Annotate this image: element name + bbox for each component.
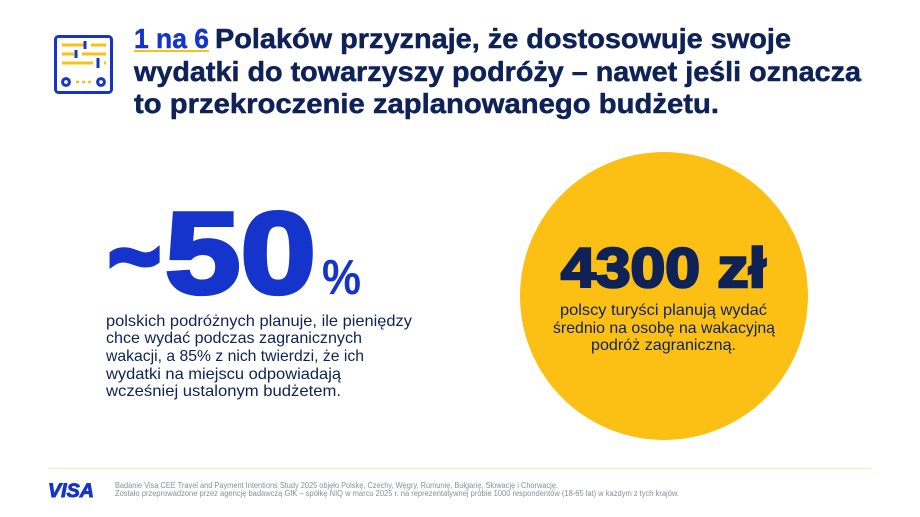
text: average spend description: polscy turyści planują wydać	[560, 302, 767, 319]
footnote	[115, 481, 679, 498]
footnote: Zostało przeprowadzone przez agencję badawczą GfK – spółkę NIQ w marcu 2025 r. na reprezentatywnej próbie 1000 respondentów (18-65 lat) w każdym z tych krajów.	[115, 489, 679, 498]
text: budget planning description: wakacji, a 85% z nich twierdzi, że ich	[105, 348, 364, 365]
text: average spend description: podróż zagraniczną.	[591, 337, 736, 354]
icon: budget sliders	[56, 36, 112, 92]
logo: Visa: VISA	[48, 481, 94, 502]
statistic: ~50%: ~	[109, 207, 160, 307]
title	[133, 23, 861, 119]
footnote: Badanie Visa CEE Travel and Payment Intentions Study 2025 objęło Polskę, Czechy, Węgry, Rumunię, Bułgarię, Słowację i Chorwację.	[115, 481, 558, 490]
text: budget planning description: polskich podróżnych planuje, ile pieniędzy	[106, 313, 412, 330]
statistic: ~50%: 50	[165, 188, 316, 318]
text: average spend description: średnio na osobę na wakacyjną	[553, 320, 775, 337]
text: average spend description	[553, 302, 775, 354]
title: 1 na 6	[134, 23, 209, 54]
text: budget planning description	[105, 313, 412, 400]
text: budget planning description: wydatki na miejscu odpowiadają	[105, 366, 341, 383]
title: Polaków przyznaje, że dostosowuje swoje	[215, 23, 791, 54]
statistic: 4300 zł: 4300 zł	[561, 236, 766, 299]
title: wydatki do towarzyszy podróży – nawet jeśli oznacza	[133, 56, 861, 87]
text: budget planning description: chce wydać podczas zagranicznych	[106, 330, 362, 347]
statistic: ~50%: %	[322, 251, 361, 305]
text: budget planning description: wcześniej ustalonym budżetem.	[105, 383, 341, 400]
panel: yellow circle with average spend	[520, 152, 808, 440]
statistic: ~50%	[109, 188, 361, 318]
title: to przekroczenie zaplanowanego budżetu.	[134, 88, 719, 119]
